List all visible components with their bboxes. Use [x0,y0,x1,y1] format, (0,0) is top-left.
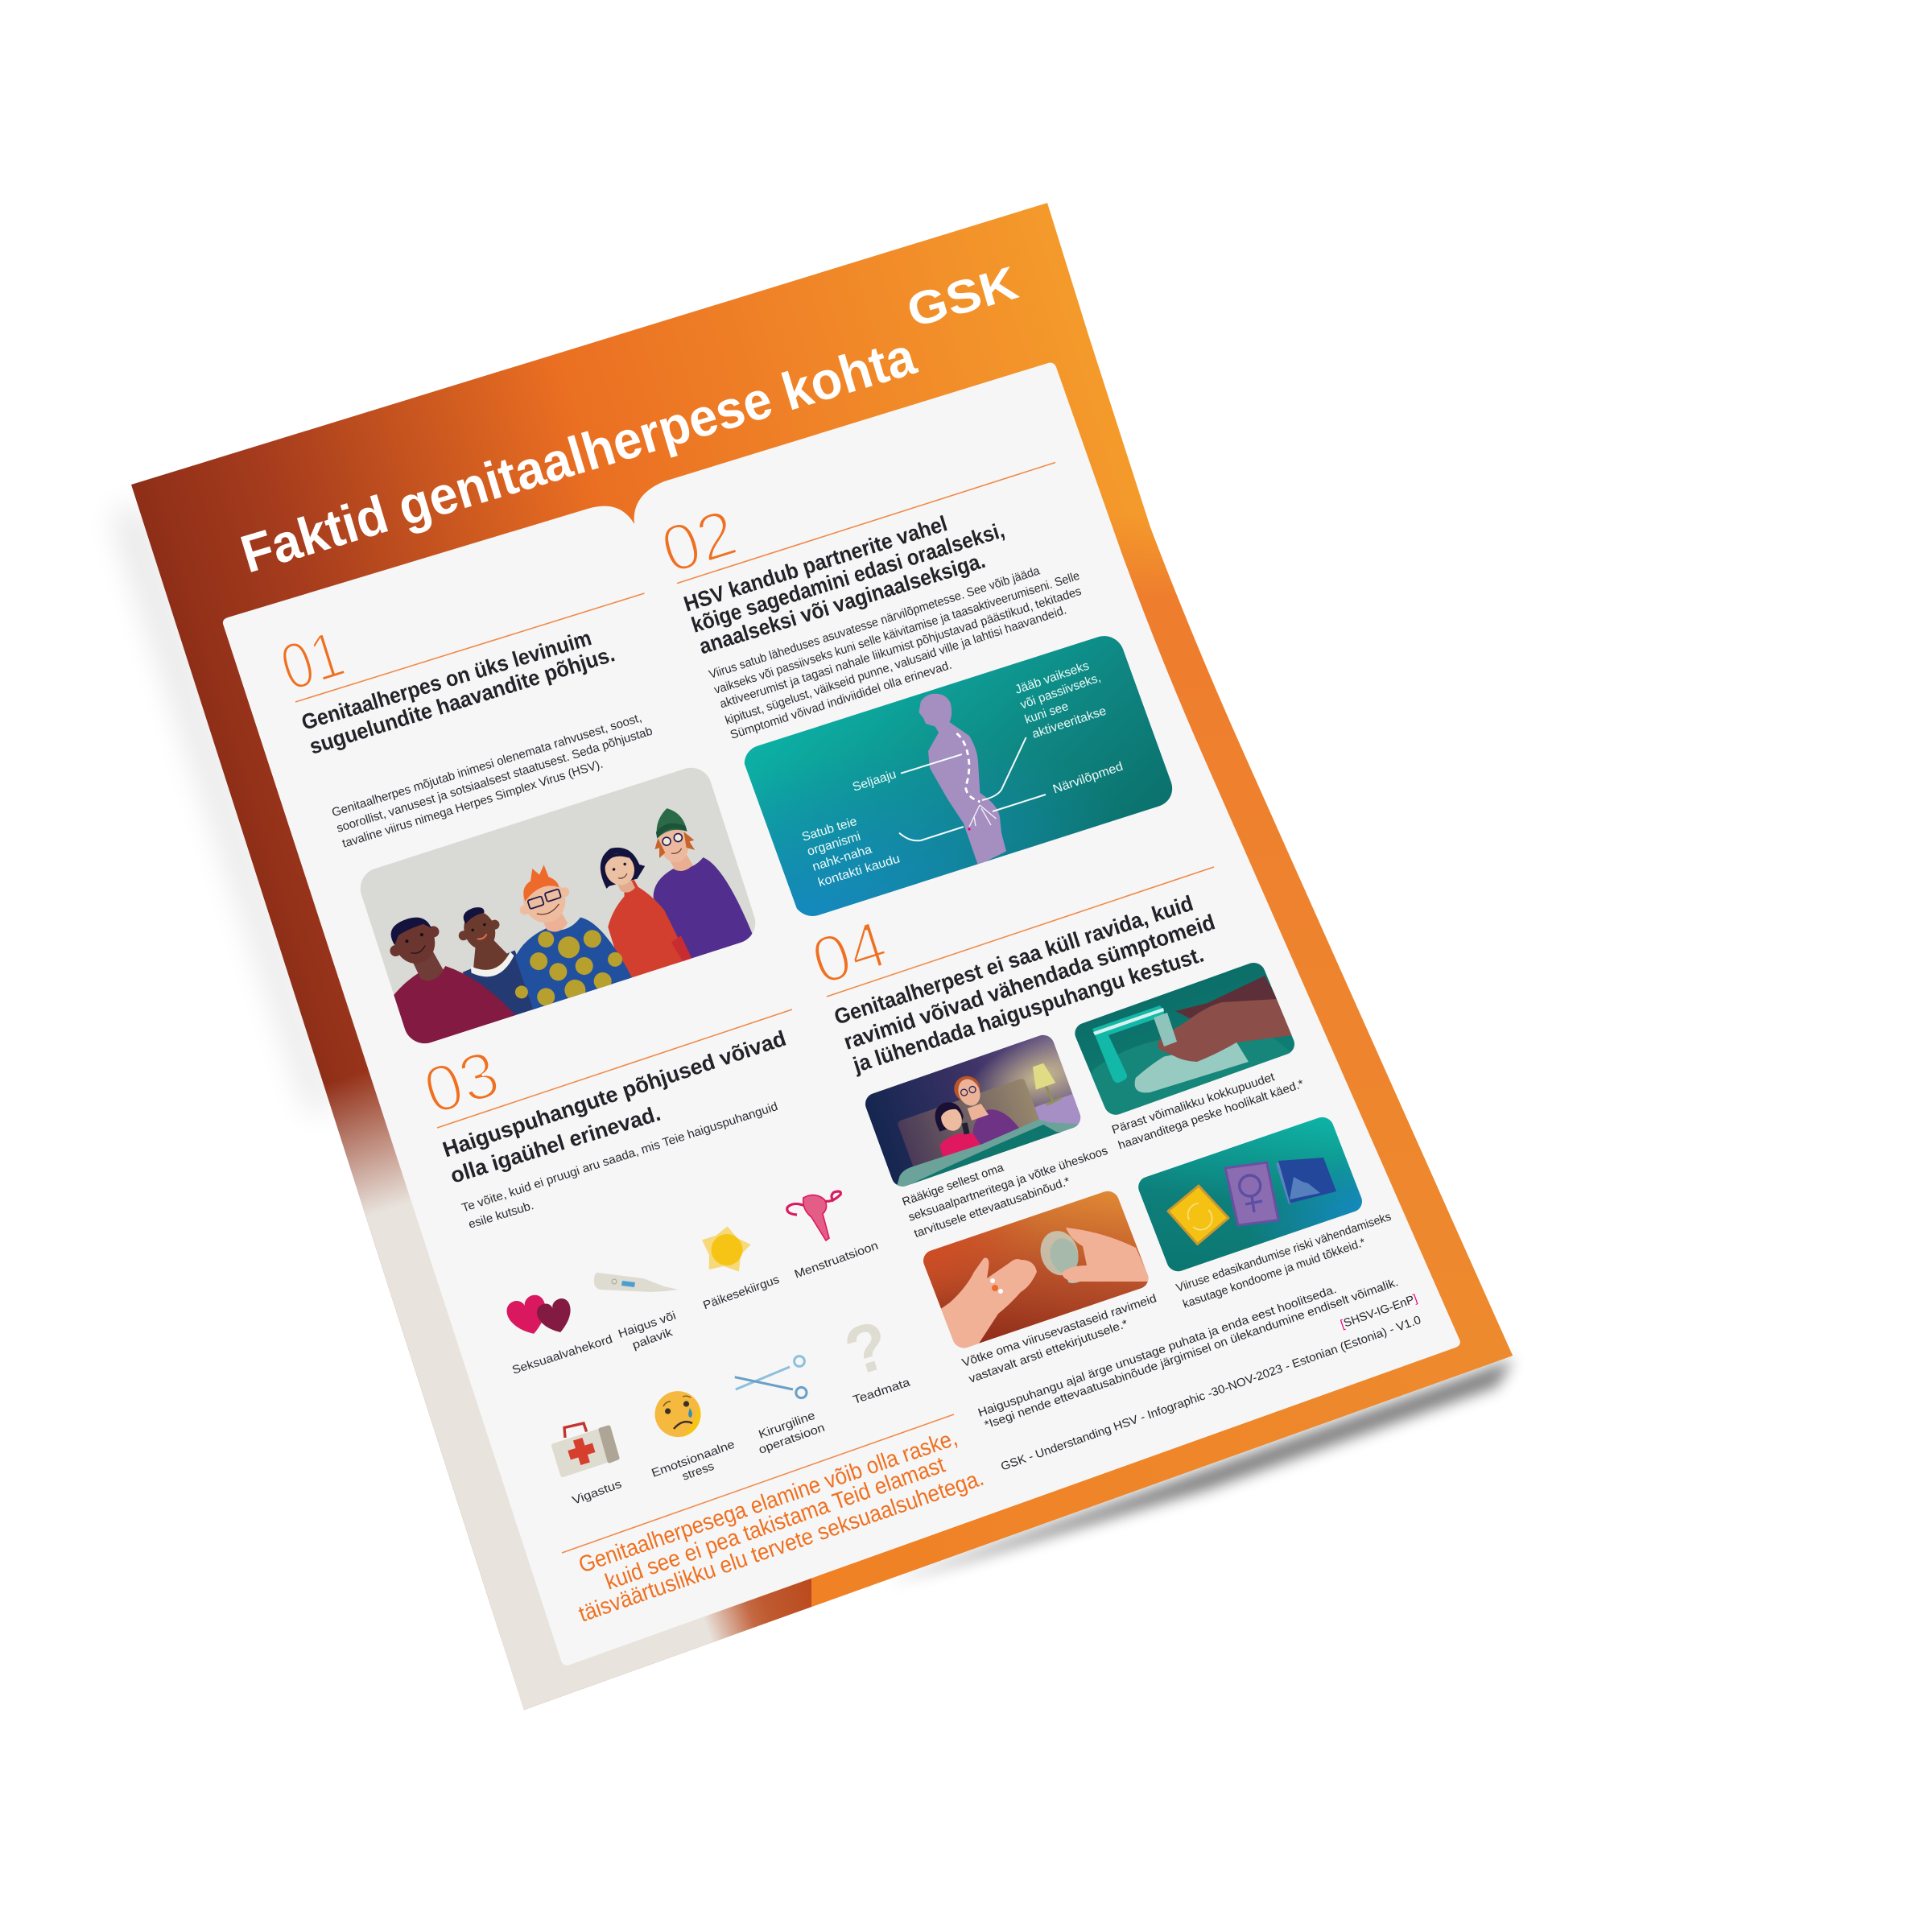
footer line: GSK - Understanding HSV - Infographic -30-NOV-2023 - Estonian (Estonia) - V1.0 [999,1314,1422,1473]
heading 01: suguelundite haavandite põhjus. [307,642,617,759]
polka-dot sweater person [515,865,632,1009]
illustration: condom and barriers [1135,1114,1365,1274]
closing message: Genitaalherpesega elamine võib olla raske, [576,1425,960,1579]
heading 04: Genitaalherpest ei saa küll ravida, kuid [832,891,1196,1030]
section 03 [415,1009,913,1508]
heading 04: ja lühendada haiguspuhangu kestust. [849,942,1207,1078]
body text 02: Viirus satub läheduses asuvatesse närvilõpmetesse. See võib jääda [708,564,1042,682]
body text 02: aktiveerumist ja tagasi nahale liikumist põhjustavad päästikud, tekitades [718,584,1083,711]
section 02 [653,462,1182,922]
orange gradient poster sheet [131,203,1546,1723]
section 01 [272,593,762,1055]
body text 01: tavaline viirus nimega Herpes Simplex Virus (HSV). [341,758,605,851]
diagram labels: aktiveeritakse [1030,704,1108,741]
caption: medication: vastavalt arsti ettekirjutusele.* [968,1318,1130,1386]
body text 02: kipitust, sügelust, väikseid punne, valusaid ville ja lahtisi haavandeid. [724,603,1068,728]
nerve branches [969,805,997,827]
caption: couple: tarvitusele ettevaatusabinõud.* [913,1175,1072,1241]
diagram labels: Närvilõpmed [1051,760,1125,796]
label: Emotsionaalne stress: stress [680,1460,716,1484]
caption: barrier protection: Viiruse edasikandumise riski vähendamiseks [1174,1211,1393,1295]
icon: surgical scissors [735,1356,807,1398]
label: Menstruatsioon: Menstruatsioon [793,1240,880,1282]
document code: [SHSV-IG-EnP] [1339,1292,1419,1331]
label: Kirurgiline operatsioon: operatsioon [757,1422,827,1457]
white content panel [223,363,1460,1666]
illustration: group of five people [351,762,762,1055]
icon: first aid kit [554,1423,617,1475]
diagram labels: kuni see [1023,700,1070,727]
number 03: 03 [415,1037,507,1129]
caption: couple: Rääkige sellest oma [901,1161,1006,1209]
body text 03: Te võite, kuid ei pruugi aru saada, mis Teie haiguspuhanguid [460,1100,779,1215]
heading 03: olla igaühel erinevad. [448,1101,663,1188]
heading 04: ravimid võivad vähendada sümptomeid [841,910,1218,1055]
navy-top person [459,907,538,1024]
illustration: medication and water [920,1188,1151,1352]
closing message: kuid see ei pea takistama Teid elamast [602,1452,948,1596]
icon: uterus [787,1191,840,1241]
caption: barrier protection: kasutage kondoome ja muid tõkkeid.* [1181,1236,1368,1311]
body text 02: vaikseks või passiivseks kuni selle käivitamise ja taasaktiveerumiseni. Selle [712,569,1081,697]
closing message: täisväärtuslikku elu tervete seksuaalsuhetega. [576,1465,987,1628]
diagram labels [800,659,1125,890]
rule 01 [295,593,644,702]
heading 03: Haiguspuhangute põhjused võivad [440,1026,789,1162]
caption: couple: seksuaalpartneritega ja võtke üheskoos [907,1145,1109,1224]
rule 02 [677,462,1055,584]
body text 01: soorollist, vanusest ja sotsiaalsest staatusest. Seda põhjustab [335,724,654,836]
label: Kirurgiline operatsioon: Kirurgiline [757,1410,817,1442]
purple-sweater person [654,808,752,964]
diagram labels: Jääb vaikseks [1013,659,1091,697]
section 04 [803,867,1422,1473]
maroon-sweater person [390,918,515,1043]
number 02: 02 [653,496,745,588]
diagram labels: Seljaaju [851,767,898,795]
diagram labels: või passiivseks, [1018,671,1103,712]
caption: medication: Võtke oma viirusevastaseid ravimeid [960,1292,1158,1370]
label: Haigus või palavik [617,1310,678,1352]
heading 01: Genitaalherpes on üks levinuim [299,625,594,735]
body text 02: Sümptomid võivad indiviididel olla erinevad. [729,658,953,742]
footnote: *Isegi nende ettevaatusabinõude järgimisel on ülekandumine endiselt võimalik. [983,1276,1400,1432]
rule 03 [437,1009,792,1128]
callout lines [899,737,1046,840]
body text 01: Genitaalherpes mõjutab inimesi olenemata rahvusest, soost, [330,711,643,819]
icon: sad face [655,1391,701,1437]
diagram labels: organismi [806,830,862,859]
body text 03: esile kutsub. [467,1199,535,1232]
label: Teadmata: Teadmata [852,1376,913,1407]
footnote: Haiguspuhangu ajal ärge unustage puhata ja enda eest hoolitseda. [976,1283,1338,1420]
diagram labels: kontakti kaudu [816,852,902,890]
rule 04 [827,867,1214,997]
illustration: couple in bed [862,1032,1084,1190]
logo: GSK: GSK [902,257,1023,337]
heading 02: kõige sagedamini edasi oraalseksi, [688,518,1007,638]
icon: sun [702,1227,751,1272]
diagram labels: nahk-naha [811,842,874,874]
sheet drop shadow [113,503,1513,1584]
label: Päikesekiirgus: Päikesekiirgus [701,1274,781,1312]
spine [956,733,980,802]
label: Seksuaalvahekord: Seksuaalvahekord [510,1333,614,1377]
icon: hearts [504,1293,577,1340]
illustration: hand washing [1075,963,1294,1115]
caption: hand washing: Pärast võimalikku kokkupuudet [1110,1071,1276,1137]
label: Haigus või palavik: Haigus või [617,1310,678,1341]
label: Haigus või palavik: palavik [630,1326,675,1352]
label: Emotsionaalne stress: Emotsionaalne [650,1439,737,1480]
label: Kirurgiline operatsioon [757,1410,827,1457]
diagram labels: Satub teie [800,815,859,844]
heading 02: HSV kandub partnerite vahel [681,511,950,617]
icon: thermometer [594,1273,679,1292]
human silhouette [919,694,1006,865]
icon: question mark: ? [836,1306,898,1390]
red-sweater person [601,847,692,980]
diagram panel: virus path through the body [739,627,1182,922]
caption: hand washing: haavanditega peske hoolikalt käed.* [1117,1078,1306,1152]
label: Vigastus: Vigastus [571,1478,624,1508]
number 01: 01 [272,617,353,705]
number 04: 04 [803,907,895,999]
title: Faktid genitaalherpese kohta [234,325,923,584]
heading 02: anaalseksi või vaginaalseksiga. [696,548,988,658]
